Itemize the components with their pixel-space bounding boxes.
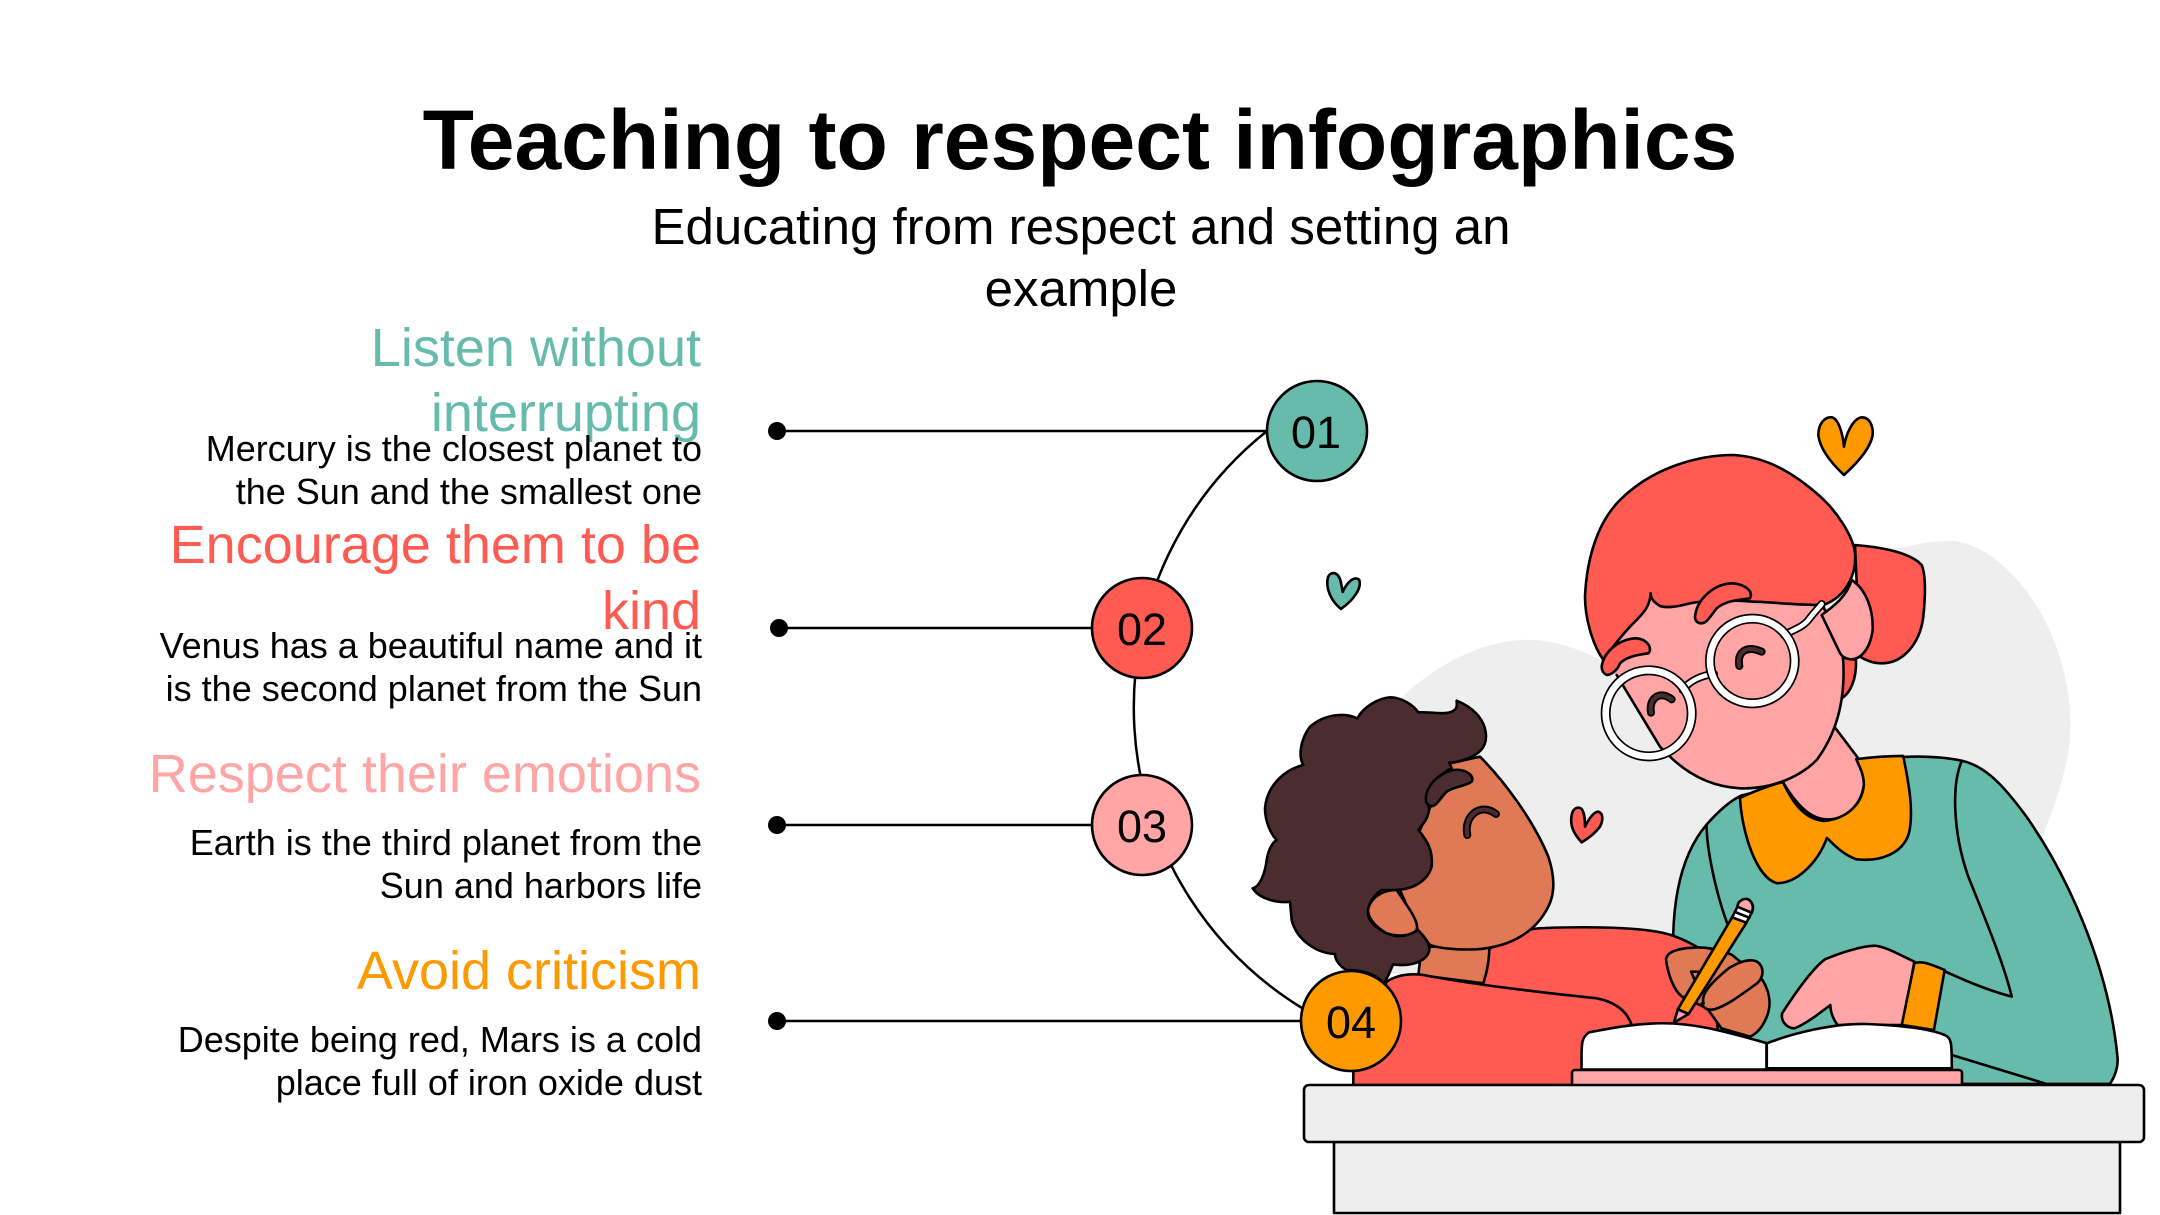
icon: red heart (1571, 808, 1602, 842)
illustration: teacher and child at desk (1253, 417, 2144, 1213)
item 2 text: kind (602, 581, 701, 641)
hands, pencil and book (1666, 899, 2045, 1083)
item 4 text: Despite being red, Mars is a cold (178, 1019, 702, 1060)
background blob (1387, 541, 2070, 974)
connector 02 (770, 619, 1095, 637)
item 1 text: the Sun and the smallest one (236, 471, 702, 512)
item 4 text: Avoid criticism (357, 941, 701, 1001)
number badge 04 (1301, 971, 1401, 1071)
teacher hand (1782, 946, 1914, 1028)
number badge 02: 02 (1117, 604, 1167, 655)
boy (1253, 697, 1632, 1085)
item 3 text: Respect their emotions (149, 744, 701, 804)
title: Teaching to respect infographics (423, 93, 1737, 187)
item 4 text (178, 941, 702, 1103)
item 3 text: Sun and harbors life (380, 865, 702, 906)
item 1 text: interrupting (431, 383, 701, 443)
number badge 01 (1267, 381, 1367, 481)
subtitle: example (985, 260, 1177, 317)
teacher body (1673, 726, 2118, 1084)
boy torso back (1480, 927, 1722, 1090)
teacher head (1585, 417, 1925, 788)
connector 04 (768, 1012, 1305, 1030)
connector 01 (768, 422, 1270, 440)
item 1 text: Mercury is the closest planet to (206, 428, 702, 469)
book right page (1767, 1024, 1952, 1068)
number badge 01: 01 (1291, 407, 1341, 458)
icon: teal heart (1327, 573, 1360, 609)
glasses (1683, 674, 1714, 690)
teacher neck (1783, 726, 1864, 819)
connector 03 (768, 816, 1095, 834)
item 2 text: Venus has a beautiful name and it (160, 625, 702, 666)
item 3 text (149, 744, 702, 906)
teacher collar (1740, 756, 1911, 883)
item 1 text (206, 318, 702, 512)
number badge 02 (1092, 578, 1192, 678)
item 2 text: is the second planet from the Sun (166, 668, 702, 709)
number badge 03 (1092, 775, 1192, 875)
book base (1572, 1070, 1962, 1086)
desk leg (1334, 1142, 2120, 1213)
connector arc (1134, 431, 1302, 1008)
subtitle (651, 198, 1511, 317)
item 1 text: Listen without (371, 318, 701, 378)
item 2 text: Encourage them to be (170, 515, 701, 575)
icon: orange heart (1818, 417, 1873, 475)
number badge 03: 03 (1117, 801, 1167, 852)
pencil (1678, 917, 1746, 1014)
item 2 text (160, 515, 702, 709)
number badge 04: 04 (1326, 997, 1376, 1048)
item 4 text: place full of iron oxide dust (276, 1062, 702, 1103)
item 3 text: Earth is the third planet from the (190, 822, 702, 863)
subtitle: Educating from respect and setting an (651, 198, 1511, 255)
book left page (1582, 1023, 1766, 1070)
desk top (1304, 1085, 2144, 1142)
